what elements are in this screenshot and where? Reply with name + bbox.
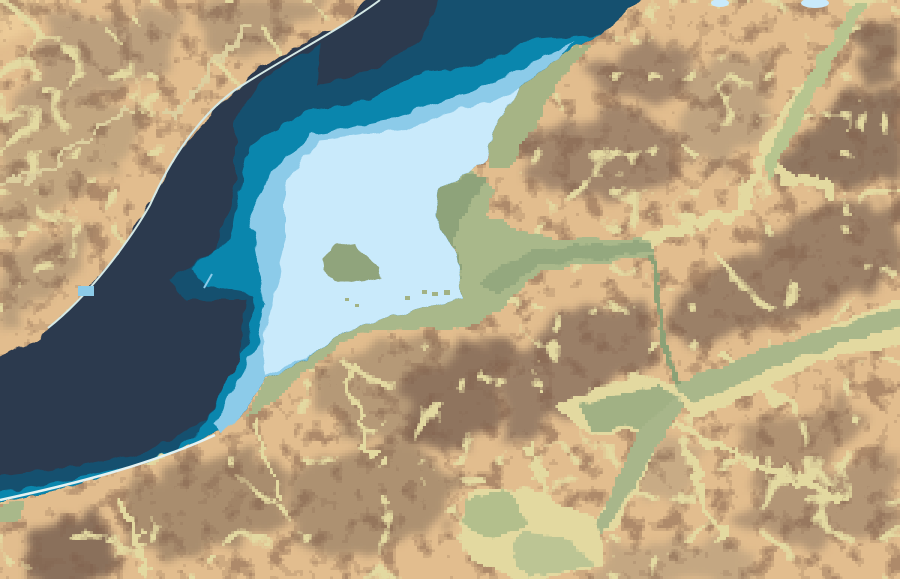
river valley (650, 245, 680, 385)
lake: shoal water (262, 90, 520, 375)
south shoreline foam (0, 435, 215, 500)
delta islets (345, 290, 450, 307)
northern lakes (711, 0, 829, 8)
coastal lowland (0, 45, 655, 520)
northwest shore relief (0, 0, 340, 330)
northwest shoal patch (78, 286, 94, 296)
northwest shoreline foam (48, 0, 380, 328)
island (322, 242, 382, 282)
lake: deep basin (0, 0, 660, 507)
lake: upper shelf (0, 0, 660, 507)
lake: mid shelf (0, 35, 600, 507)
broad lowland plains (458, 0, 900, 579)
lake: shallow shelf (215, 42, 575, 432)
underwater streak (204, 274, 212, 288)
